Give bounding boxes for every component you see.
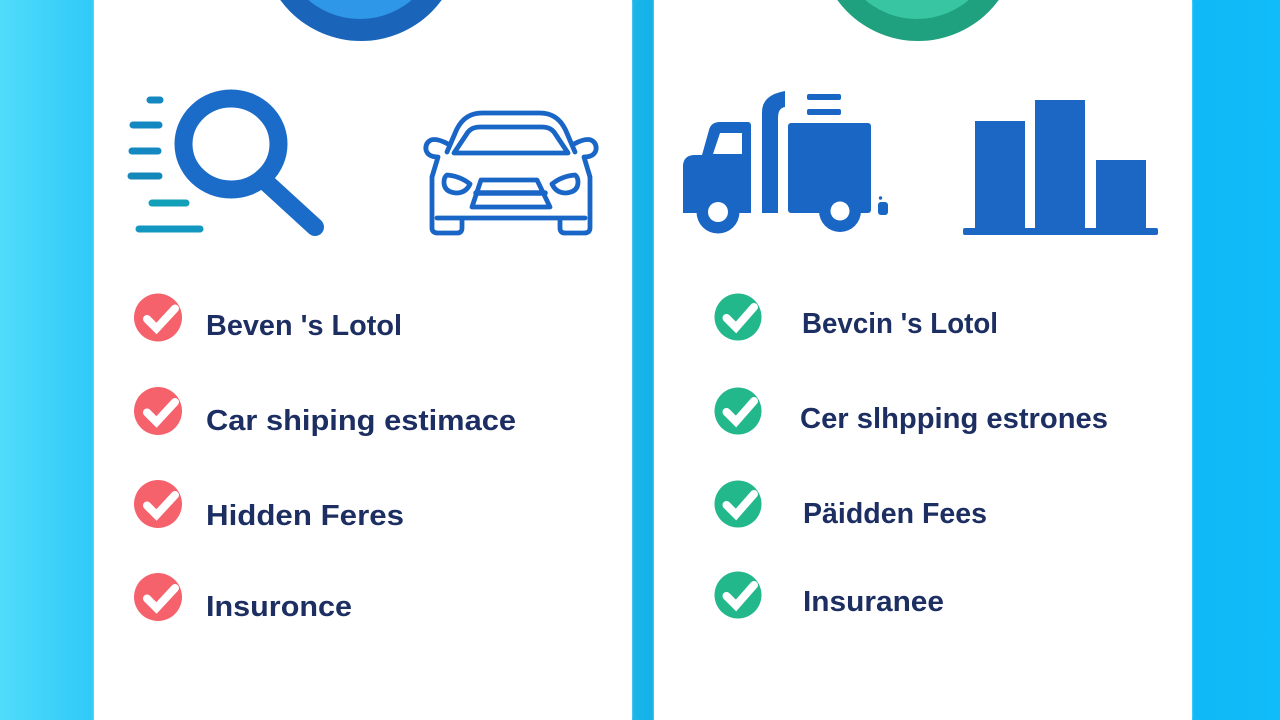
icon: red check 3 — [134, 480, 182, 528]
label: Cer slipping estrones: Cer slhpping estrones — [800, 403, 1108, 435]
label: Insuronce: Insuronce — [206, 591, 352, 623]
icon: red check 4 — [134, 573, 182, 621]
label: Beven's Lotol: Beven 's Lotol — [206, 310, 402, 342]
icon: red check 2 — [134, 387, 182, 435]
icon: red check 1 — [134, 294, 182, 342]
label: Car shiping estimace: Car shiping estimace — [206, 405, 516, 437]
icon: bar chart — [963, 100, 1158, 235]
panel: right card — [654, 0, 1192, 720]
label: Insuranee: Insuranee — [803, 586, 944, 618]
icon: green check 1 — [714, 294, 762, 340]
label: Bevcin's Lotol: Bevcin 's Lotol — [802, 308, 998, 340]
icon: magnifying glass — [131, 98, 315, 229]
label: Paidden Fees: Päidden Fees — [803, 498, 987, 530]
icon: car — [426, 113, 596, 233]
label: Hidden Feres: Hidden Feres — [206, 500, 404, 532]
panel: left card — [94, 0, 632, 720]
right checklist — [714, 294, 1108, 618]
icon: left blue badge — [261, 0, 461, 41]
icon: green check 4 — [714, 572, 762, 618]
icon: green check 3 — [714, 480, 762, 528]
icon: right green badge — [818, 0, 1018, 41]
icon: truck — [683, 91, 888, 234]
icon: green check 2 — [714, 388, 762, 434]
left checklist — [134, 294, 516, 623]
